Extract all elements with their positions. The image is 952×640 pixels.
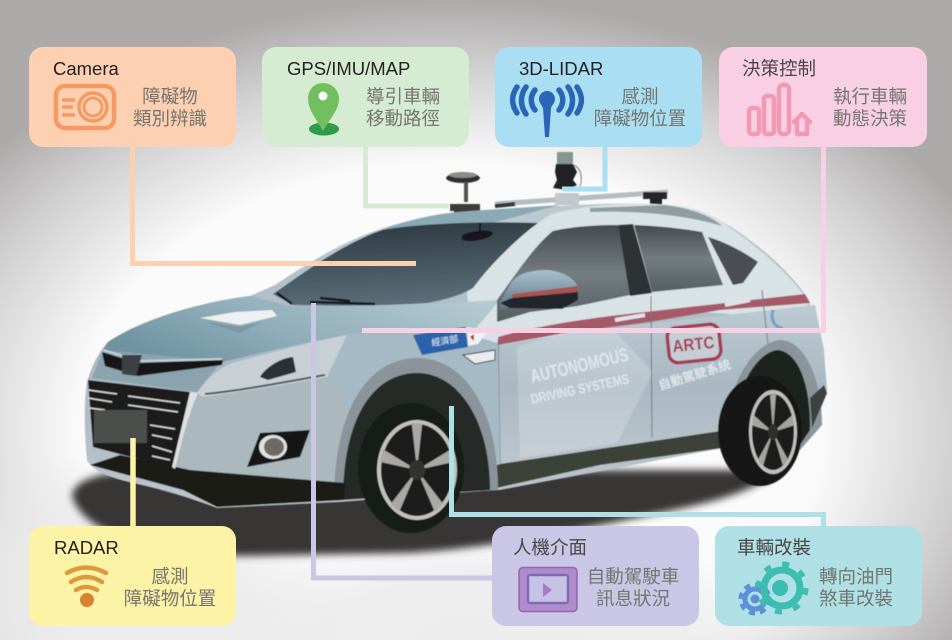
panel: human machine interface (492, 526, 699, 626)
rear badge (772, 310, 783, 328)
side marker (463, 350, 495, 364)
car body (85, 204, 827, 508)
fender (327, 331, 500, 470)
gps antenna (446, 172, 480, 217)
headlight (197, 335, 347, 397)
panel: lidar (495, 47, 702, 147)
hood badge (200, 310, 277, 333)
panel: camera (29, 47, 236, 147)
rear quarter (810, 385, 827, 428)
text: radar description (124, 566, 216, 609)
text: modification description (819, 566, 893, 609)
connector: lidar (562, 147, 605, 189)
connector: hmi (314, 303, 492, 578)
panel: gps (262, 47, 469, 147)
door side panel (500, 305, 827, 463)
text: hmi description: 自動駕駛車 (587, 566, 679, 587)
rear window (634, 225, 723, 292)
text: camera description (133, 86, 207, 129)
front wheel (358, 403, 464, 533)
door handles (615, 300, 750, 320)
windshield (273, 222, 538, 306)
text: gps description: 導引車輛 (366, 86, 440, 107)
icon: antenna (512, 87, 582, 137)
connector: vehicle modification (452, 406, 824, 527)
text: modification description: 轉向油門 (819, 566, 893, 587)
text: decision description: 執行車輛 (833, 86, 907, 107)
text: gps description (366, 86, 440, 129)
driving systems text: DRIVING SYSTEMS (529, 370, 630, 407)
roof rack (495, 192, 668, 210)
lidar sensor (553, 152, 581, 190)
heading: hmi: 人機介面 (513, 537, 587, 558)
text: lidar description (594, 86, 686, 129)
rear wheel arch (722, 340, 822, 450)
sill (483, 430, 729, 491)
text: radar description: 障礙物位置 (124, 588, 216, 609)
upper grille and badge (102, 350, 223, 376)
text: decision description: 動態決策 (833, 108, 907, 129)
roof rail and shoulder (467, 204, 813, 345)
heading: decision control: 決策控制 (742, 58, 816, 79)
b pillar (618, 224, 652, 296)
front fascia (92, 350, 222, 392)
panel: radar (29, 526, 236, 626)
text: radar description: 感測 (151, 566, 189, 587)
lower door graphic (517, 328, 653, 458)
text: gps description: 移動路徑 (366, 108, 440, 129)
text: modification description: 煞車改裝 (819, 588, 893, 609)
grille (88, 380, 198, 469)
side blue sticker: 經濟部 (431, 333, 459, 348)
text: hmi description (587, 566, 679, 609)
icon: map pin (308, 83, 339, 136)
heading: camera: Camera (53, 58, 120, 79)
panel: decision control (719, 47, 927, 147)
text: lidar description: 障礙物位置 (594, 108, 686, 129)
icon: gears (741, 564, 806, 613)
front bumper (170, 375, 365, 507)
license plate (94, 410, 147, 443)
hood (103, 296, 500, 362)
chinese door text: 自動駕駛系統 (656, 356, 733, 393)
ARTC logo (666, 323, 722, 364)
wipers (277, 293, 375, 304)
icon: video screen (519, 568, 577, 612)
text: hmi description: 訊息狀況 (596, 588, 670, 609)
door seams (498, 290, 768, 463)
front side window (497, 225, 630, 322)
heading: vehicle modification: 車輛改裝 (737, 537, 811, 558)
autonomous text: AUTONOMOUS (528, 345, 631, 388)
panel: vehicle modification (715, 526, 922, 626)
roof (372, 205, 560, 234)
text: camera description: 障礙物 (142, 86, 198, 107)
connector: radar (130, 438, 136, 527)
text: lidar description: 感測 (621, 86, 659, 107)
front bumper lower lip (90, 455, 345, 507)
icon: bar chart (749, 85, 810, 134)
text: decision description (833, 86, 907, 129)
connector: gps (366, 147, 450, 206)
side mirror (500, 270, 578, 310)
front wheel arch (334, 358, 498, 500)
rear view mirror (463, 223, 492, 240)
text: camera description: 類別辨識 (133, 108, 207, 129)
connector: camera (132, 147, 416, 264)
heading: lidar: 3D-LIDAR (519, 58, 603, 79)
fog lamp (247, 430, 310, 467)
icon: camera (56, 86, 114, 128)
icon: wifi signal (67, 568, 106, 607)
side blue sticker (413, 327, 488, 355)
rear wheel (718, 376, 802, 486)
heading: radar: RADAR (54, 537, 119, 558)
heading: gps: GPS/IMU/MAP (287, 58, 410, 79)
car shadow (72, 470, 780, 556)
connector: decision (362, 147, 824, 330)
quarter window (708, 237, 758, 285)
ARTC logo: ARTC (672, 333, 715, 356)
red stripe (498, 294, 810, 345)
car photo (85, 152, 827, 533)
